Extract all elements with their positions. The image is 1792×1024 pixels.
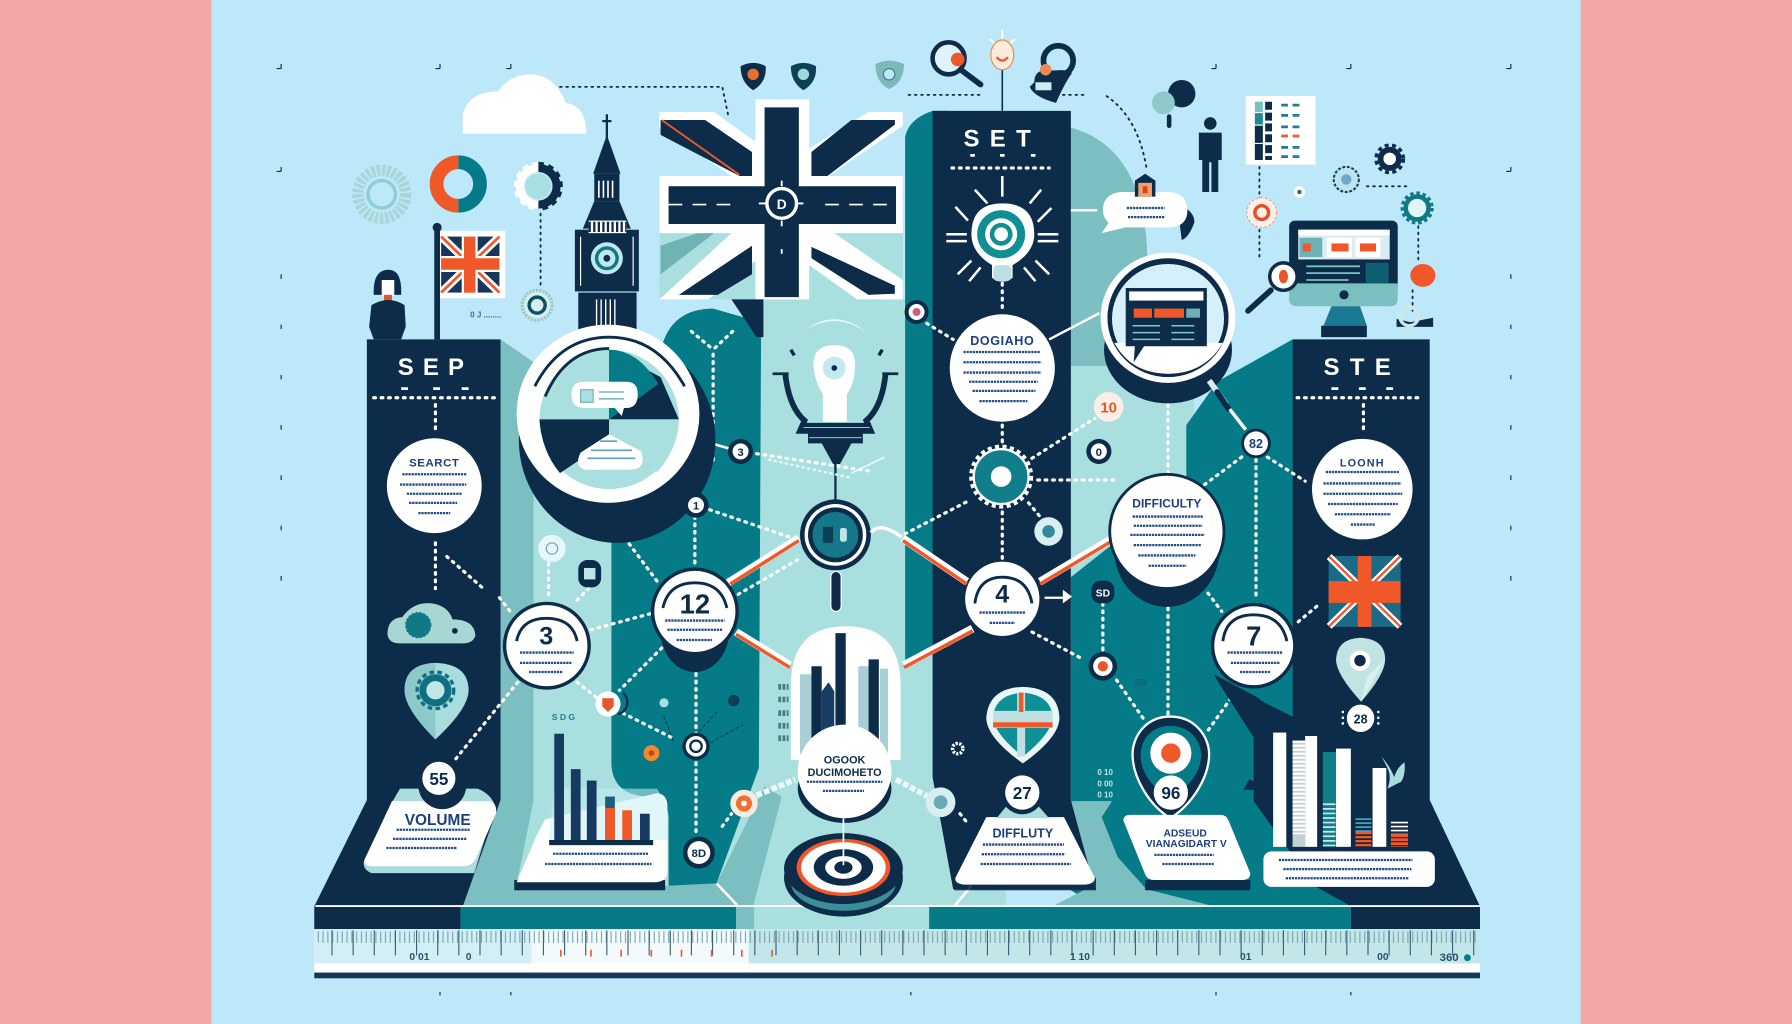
bar chart right — [1243, 706, 1405, 847]
gear in SET column — [971, 447, 1031, 506]
road dashes and centre hub — [669, 204, 903, 206]
small gears top right — [1247, 145, 1435, 327]
flag white diagonal bands — [659, 112, 903, 299]
chat window — [1126, 288, 1207, 362]
circle: OGOOK DUCIMOHETO — [798, 725, 891, 823]
circle: DOGIAHO: DOGIAHO — [970, 334, 1034, 348]
small teal gear — [470, 290, 552, 320]
number badges right of SET: 10 — [1100, 401, 1117, 417]
chat bubble in lens — [571, 382, 638, 416]
STE heading — [1297, 354, 1423, 398]
large magnifier with chat — [1101, 253, 1246, 430]
pin in STE column — [1336, 638, 1385, 702]
cloud — [463, 74, 586, 134]
dotted connectors — [435, 87, 1418, 906]
monitor — [1289, 221, 1398, 337]
badges centre-left — [595, 691, 743, 761]
circle: DIFFICULTY: DIFFICULTY — [1132, 496, 1201, 510]
circle: SEARCT — [387, 438, 482, 533]
flag lower left teal band — [661, 233, 714, 274]
card: VOLUME: VOLUME — [405, 812, 471, 829]
badge beside gear — [1034, 517, 1063, 546]
pale gear left — [358, 170, 406, 218]
ruler — [314, 929, 1480, 978]
card under right chart — [1263, 851, 1435, 887]
teal sliver by SET column — [905, 111, 949, 667]
flag orange edge — [662, 120, 739, 175]
card: ADSEUD — [1123, 815, 1250, 890]
circle badge 8D: 8D — [692, 848, 706, 860]
number badges right of SET — [1086, 392, 1271, 464]
card in lens — [578, 434, 643, 470]
flag dark diagonals — [661, 120, 895, 295]
orange link bars — [728, 538, 1111, 667]
badges right of 4: 0 10 — [1097, 768, 1113, 777]
target disc — [784, 818, 903, 917]
central light blue panel — [211, 0, 1581, 1024]
circle: DOGIAHO — [950, 314, 1055, 422]
dotted Y in teal block — [691, 331, 733, 463]
teal left-centre block — [611, 309, 761, 886]
card: ADSEUD: ADSEUD — [1163, 829, 1207, 840]
circle: 12 — [653, 569, 737, 672]
capsule skyline — [791, 626, 901, 760]
badges right of 4: SD — [1096, 589, 1110, 600]
card: VOLUME: 55 — [429, 769, 449, 789]
circle: LOONH — [1312, 439, 1413, 539]
dark SEP column — [314, 339, 501, 906]
icon: gear pin in SEP column — [405, 663, 469, 739]
mid teal rounded shape right of SET — [1063, 126, 1147, 383]
ruler: 1 10 — [1070, 952, 1090, 963]
dark STE column — [1254, 339, 1480, 906]
pale left strip — [517, 362, 669, 886]
icon: small magnifier by monitor — [1248, 263, 1297, 311]
chart card — [514, 880, 665, 890]
STE heading: STE — [1324, 354, 1401, 381]
circle: 3: 3 — [539, 623, 553, 651]
teal region right of SET — [1071, 339, 1351, 906]
small connector badges left — [538, 439, 753, 587]
background columns and terrain — [314, 111, 1480, 906]
circle: OGOOK DUCIMOHETO: DUCIMOHETO — [808, 767, 882, 779]
icon: chat head cluster — [1152, 80, 1195, 128]
registration marks — [277, 64, 1515, 995]
card: DIFFLUTY: DIFFLUTY — [992, 827, 1054, 841]
card: ADSEUD: VIANAGIDART V — [1146, 839, 1227, 850]
person silhouette — [369, 270, 406, 339]
SET heading: SET — [964, 125, 1041, 152]
light bulb — [768, 320, 898, 503]
circle: 12: 12 — [680, 589, 710, 620]
circle: 7: 7 — [1246, 621, 1261, 652]
target pin — [1133, 717, 1209, 818]
half gear — [515, 163, 561, 209]
icon: cloud in SEP column — [387, 603, 475, 643]
pale centre band — [717, 299, 934, 906]
ruler: 00 — [1377, 952, 1389, 963]
target pin: 96 — [1161, 783, 1180, 803]
circle: 7 — [1213, 605, 1295, 743]
circle badge 8D — [683, 837, 715, 869]
SET bulb target icon — [946, 176, 1058, 282]
bars — [554, 734, 564, 841]
big magnifier left — [517, 325, 715, 543]
circle: 4: 4 — [995, 580, 1009, 608]
small gear in SET column — [953, 743, 963, 754]
donut chart — [437, 162, 480, 206]
bar chart centre-left — [514, 712, 667, 890]
SEP heading — [374, 354, 497, 398]
ruler: 360 — [1440, 952, 1459, 964]
small teal gear: 0 J ........ — [470, 311, 501, 320]
circle: 4 — [965, 562, 1039, 636]
small magnifier centre — [800, 499, 902, 611]
SET heading — [952, 125, 1049, 168]
arrow right from 4 — [1045, 590, 1072, 603]
badges right of 4: 0 00 — [1097, 779, 1113, 788]
bead connectors — [730, 779, 969, 825]
speech bubble with shield — [1102, 174, 1194, 240]
card: DIFFLUTY — [954, 771, 1096, 890]
mid teal left strip — [463, 339, 737, 906]
circle: SEARCT: SEARCT — [409, 457, 459, 469]
bar chart centre-left: S D G — [552, 712, 575, 722]
badges right of 4: 0 10 — [1097, 791, 1113, 800]
slanted mid teal wedge — [717, 786, 782, 906]
number badges right of SET: 82 — [1249, 437, 1263, 451]
circle: 3 — [505, 603, 589, 688]
ruler: 01 — [1240, 952, 1252, 963]
mid teal lower patch — [1053, 801, 1214, 906]
flag pin in SET column — [986, 687, 1059, 763]
large Union flag — [659, 99, 903, 299]
circle: LOONH: LOONH — [1340, 457, 1385, 469]
flag backing — [659, 233, 755, 299]
icon: loop figure top — [1030, 46, 1073, 103]
card: DIFFLUTY: 27 — [1013, 783, 1032, 803]
icon: person standing — [1199, 117, 1222, 192]
base band — [314, 905, 1480, 929]
Big Ben tower — [575, 114, 639, 350]
shield icons — [741, 61, 904, 90]
badges right of 4: SD — [1134, 678, 1147, 688]
flag on pole — [433, 223, 505, 339]
flag cross dark — [669, 107, 896, 297]
flag cross white — [659, 99, 903, 299]
SEP heading: SEP — [398, 354, 473, 381]
badges right of 4 — [1089, 581, 1147, 800]
circle: OGOOK DUCIMOHETO: OGOOK — [824, 754, 866, 766]
card: VOLUME — [364, 761, 496, 873]
mini data table — [1246, 96, 1315, 165]
badge 28: 28 — [1354, 712, 1368, 726]
large Union flag: D — [777, 197, 787, 212]
badge left of SET — [905, 300, 929, 324]
ruler: 0 01 — [409, 952, 430, 963]
pale area right of SET — [1071, 366, 1194, 594]
dark SET column — [933, 111, 1095, 889]
icon: magnifier top — [933, 42, 981, 85]
icon: bulb top — [990, 30, 1015, 111]
circle: DIFFICULTY — [1110, 474, 1224, 607]
number badges right of SET: 0 — [1096, 447, 1102, 459]
pale lower patch under SET — [929, 766, 1006, 906]
small connector badges left: 3 — [737, 447, 744, 459]
flag lower right — [1329, 556, 1401, 627]
grey tick labels — [778, 687, 789, 738]
dark wedge under flag — [731, 299, 763, 337]
small connector badges left: 1 — [693, 501, 700, 513]
ruler: 0 — [466, 952, 472, 963]
handle — [1209, 381, 1226, 405]
badge 28 — [1343, 705, 1378, 732]
